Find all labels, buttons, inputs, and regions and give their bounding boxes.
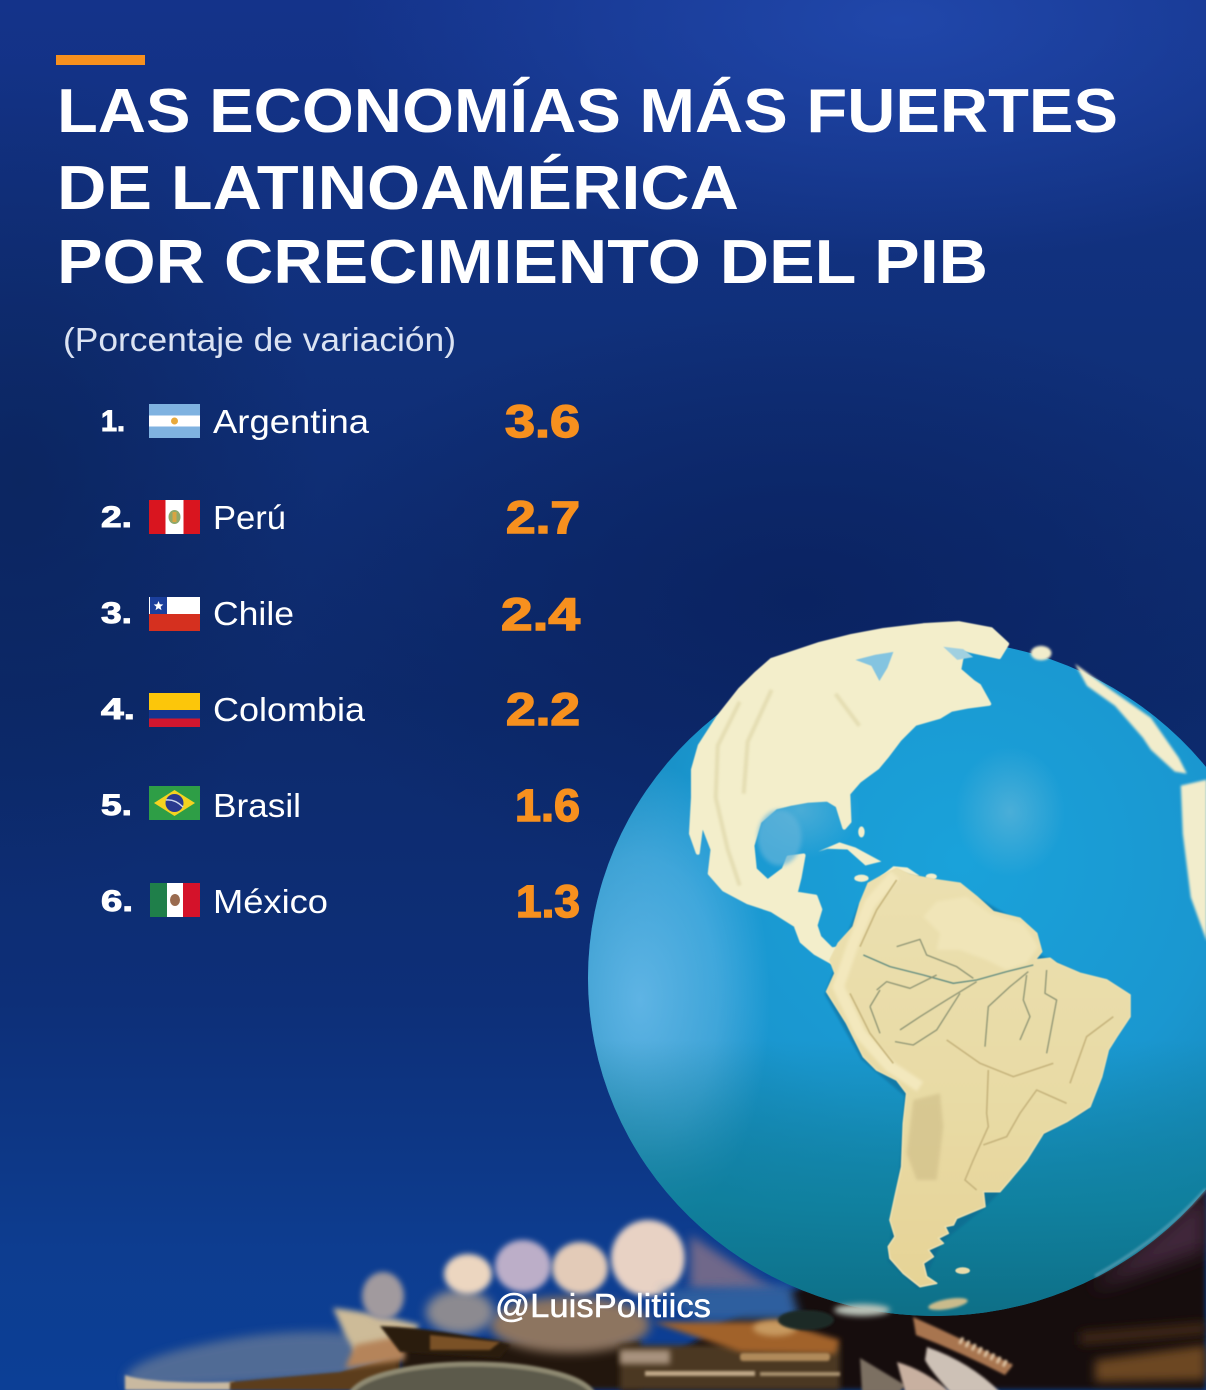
row: Chile: 2.4 [501,589,580,640]
gulf of mexico [758,810,802,865]
row: México: México [213,883,328,920]
row: Argentina: Argentina [213,403,370,440]
row: Brasil: 5. [101,789,132,822]
flag: Argentina [149,404,200,438]
hudson bay [855,652,893,681]
row: Brasil: Brasil [213,787,301,824]
title: LAS ECONOMÍAS MÁS FUERTES [57,77,1118,146]
row: México [101,876,580,927]
row: Argentina: 1. [101,405,125,438]
andes ridge [838,875,920,1087]
row: Brasil: 1.6 [515,780,580,831]
watermark handle: @LuisPolitiics [495,1287,711,1324]
row: Brasil [101,780,580,831]
translucent large coin [125,1332,400,1390]
coins background [125,1170,1206,1390]
title: POR CRECIMIENTO DEL PIB [57,228,988,297]
row: México: 6. [101,885,133,918]
row: Chile: Chile [213,595,294,632]
globe rim light [1095,1189,1206,1276]
north america relief [716,690,859,885]
flag: Colombia [149,693,200,727]
guiana highlands [923,897,1038,970]
globe [588,620,1206,1316]
bokeh highlights [362,1272,404,1320]
row: Colombia: Colombia [213,691,366,728]
flag: Perú [149,500,200,534]
title: DE LATINOAMÉRICA [57,154,739,223]
accent bar [56,55,145,65]
flag: México [150,883,200,917]
row: Colombia [101,684,580,735]
subtitle: (Porcentaje de variación) [63,321,456,358]
rivers [863,939,1057,1053]
south america [825,868,1130,1289]
dark foreground mass [620,1170,1206,1390]
row: Argentina: 3.6 [505,396,580,447]
title [57,77,1118,297]
row: Colombia: 2.2 [506,684,580,735]
blurred brown and blue behind globe [684,1232,777,1292]
row: Perú: Perú [213,499,286,536]
row: Perú: 2. [101,501,132,534]
ranking list [101,396,580,927]
flag: Chile [149,597,200,631]
row: Chile: 3. [101,597,132,630]
africa and europe edge [1031,646,1206,941]
north america [691,623,1206,969]
blurred tan mid coins [400,1340,640,1390]
row: Perú: 2.7 [506,492,580,543]
row: México: 1.3 [516,876,580,927]
silver coin at the bottom centre [350,1364,594,1390]
flag: Brasil [149,786,200,820]
row: Chile [101,589,580,640]
row: Argentina [101,396,580,447]
caribbean islands [818,826,937,882]
brown stacks [620,1345,840,1390]
coins in front of the globe [834,1296,1013,1390]
row: Perú [101,492,580,543]
globe sphere [588,648,1206,1316]
row: Colombia: 4. [101,693,135,726]
